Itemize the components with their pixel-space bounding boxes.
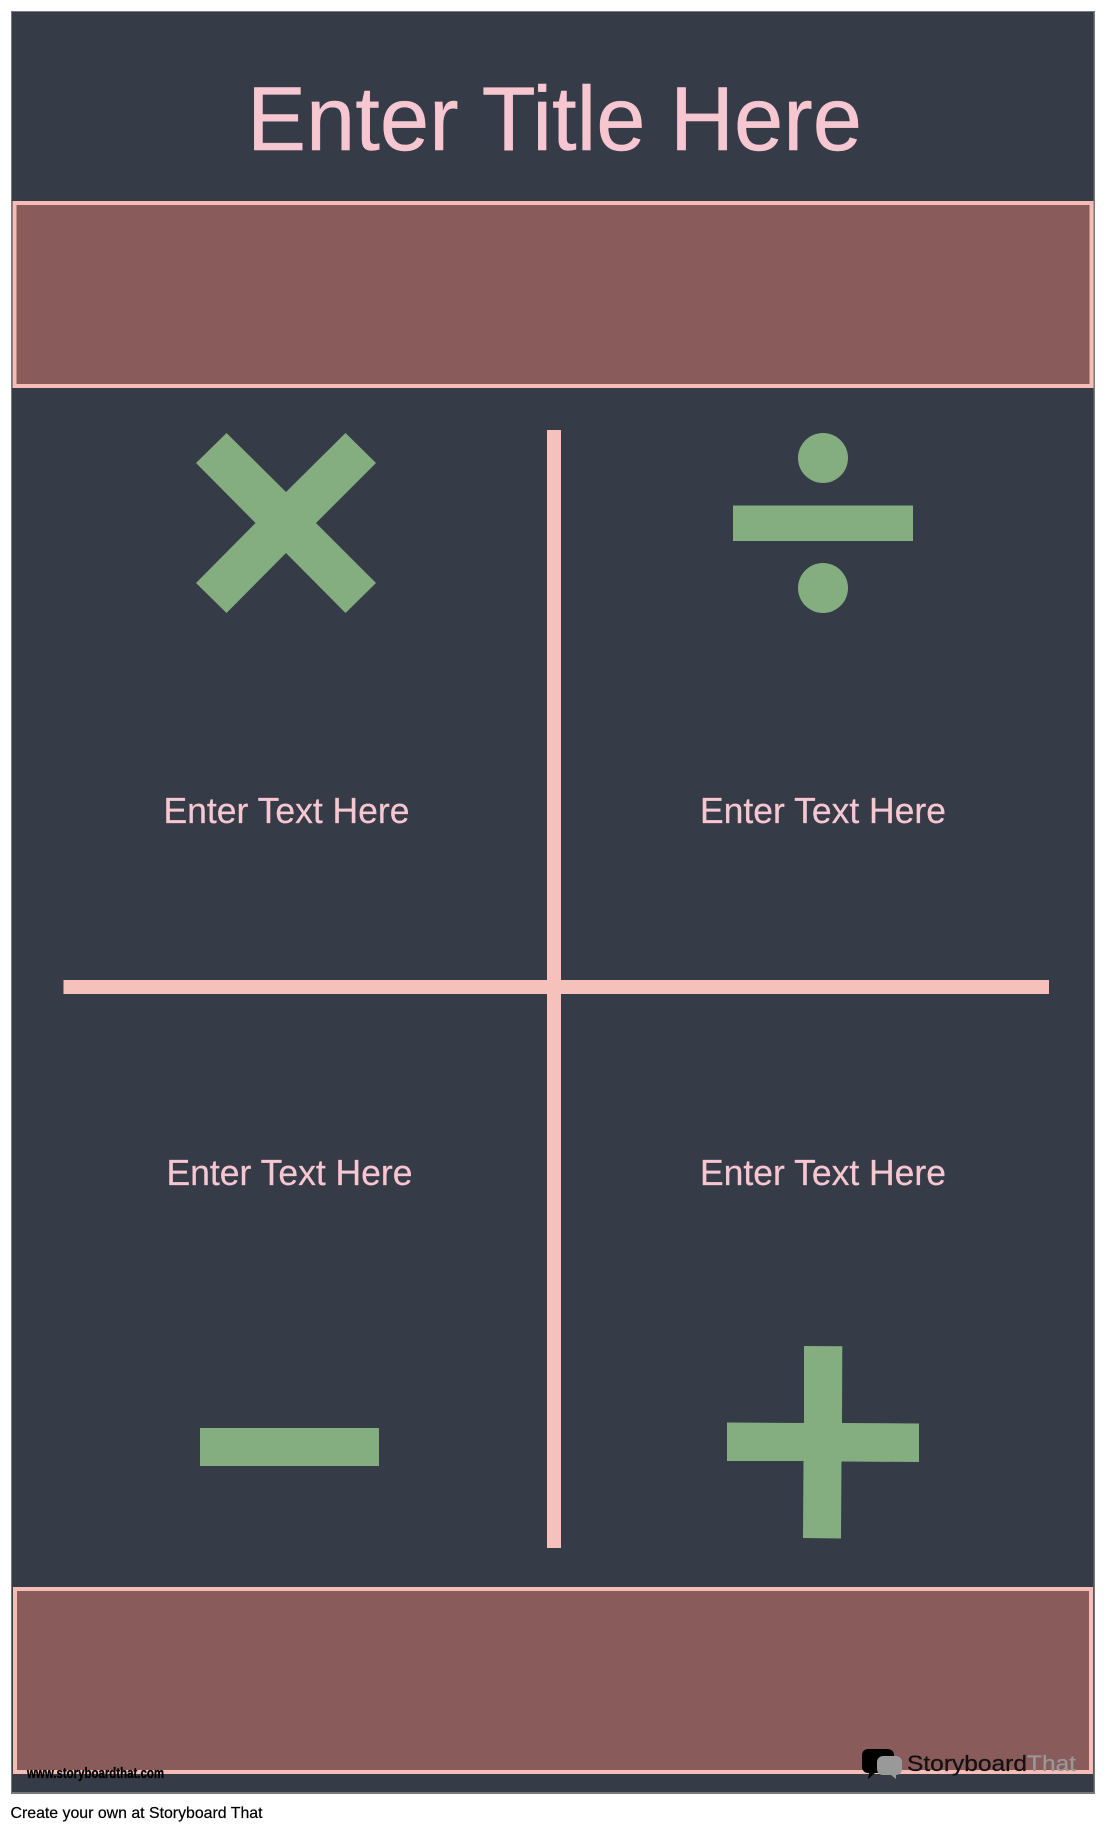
logo wordmark: That: That bbox=[1027, 1751, 1076, 1776]
text: bottom-right quadrant: Enter Text Here bbox=[700, 1152, 946, 1193]
text: top-right quadrant: Enter Text Here bbox=[700, 790, 946, 831]
panel: bottom banner bbox=[15, 1589, 1091, 1772]
icon: division sign bbox=[733, 433, 913, 613]
text: bottom-left quadrant: Enter Text Here bbox=[166, 1152, 412, 1193]
icon: plus sign bbox=[727, 1346, 919, 1538]
quadrant divider: vertical bar bbox=[547, 430, 561, 1548]
logo wordmark: Storyboard: Storyboard bbox=[907, 1751, 1027, 1776]
panel: top banner bbox=[14, 203, 1092, 386]
icon: black speech bubble bbox=[862, 1749, 894, 1779]
watermark url: www.storyboardthat.com bbox=[26, 1766, 164, 1782]
icon: multiplication sign bbox=[196, 433, 376, 613]
title: Enter Title Here bbox=[247, 69, 862, 170]
icon: minus sign bbox=[200, 1428, 379, 1466]
icon: gray speech bubble bbox=[877, 1756, 902, 1779]
text: top-left quadrant: Enter Text Here bbox=[164, 790, 410, 831]
quadrant divider: horizontal bar bbox=[64, 980, 1049, 994]
logo: Storyboard That bbox=[862, 1749, 1076, 1779]
caption: Create your own at Storyboard That bbox=[10, 1805, 263, 1822]
